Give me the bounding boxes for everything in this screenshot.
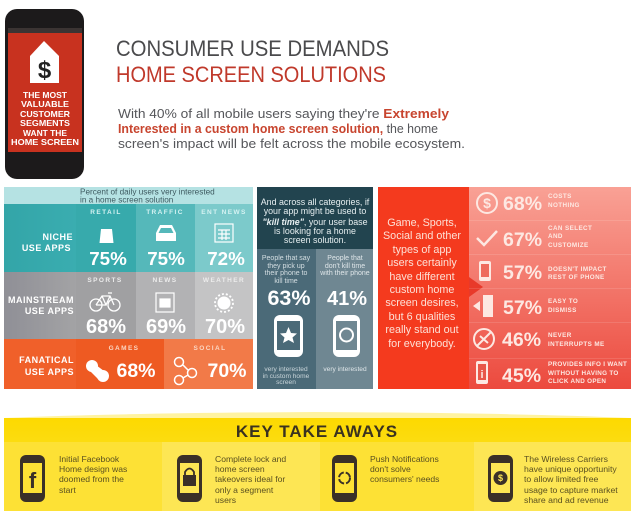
icon: car [156, 225, 176, 241]
column: 63%: screen [276, 379, 296, 386]
column: 41% [316, 249, 373, 389]
quality: costs nothing: COSTS [548, 193, 572, 200]
takeaway: wireless carriers: share and ad revenue [524, 495, 609, 505]
title [116, 36, 389, 87]
icon: bicycle [90, 293, 120, 311]
row: fanatical use apps [4, 339, 253, 389]
quality: easy to dismiss: DISMISS [548, 307, 577, 314]
takeaway: facebook [20, 454, 127, 502]
takeaway: facebook: f [29, 468, 37, 493]
column: 41%: don't kill time [325, 263, 365, 270]
column: 63%: kill time [274, 278, 298, 285]
phone caption: THE MOST [23, 91, 67, 100]
kill time heading [257, 187, 373, 249]
takeaway: lock: takeovers ideal for [215, 474, 285, 484]
column: 41%: 41% [327, 288, 367, 310]
takeaway: facebook: doomed from the [59, 474, 124, 484]
takeaway: push notifications: don't solve [370, 464, 411, 474]
takeaway: wireless carriers: have unique opportunity [524, 464, 617, 474]
quality: costs nothing: NOTHING [548, 202, 580, 209]
quality: provides info: i [480, 369, 484, 381]
icon: price tag [30, 41, 59, 84]
column: 63%: they pick up [267, 263, 305, 270]
intro text: With 40% of all mobile users saying they're Extremely [118, 107, 449, 121]
icon: newspaper [215, 224, 233, 242]
title: HOME SCREEN SOLUTIONS [116, 62, 386, 87]
row: niche use apps: ENT NEWS [201, 209, 247, 216]
kill time heading: "kill time", your user base [262, 217, 368, 227]
row: mainstream use apps: NEWS [152, 277, 178, 284]
quality: easy to dismiss: 57% [503, 297, 542, 319]
row: fanatical use apps: USE APPS [25, 367, 74, 377]
quality: never interrupts me: INTERRUPTS ME [548, 341, 605, 348]
row: niche use apps: 75% [147, 248, 185, 269]
row: niche use apps: NICHE [42, 232, 73, 242]
row: mainstream use apps: MAINSTREAM [8, 295, 74, 305]
column: 63%: in custom home [263, 373, 310, 380]
icon: shopping bag [100, 229, 114, 243]
quality: costs nothing [477, 193, 580, 215]
row: mainstream use apps: SPORTS [87, 277, 123, 284]
takeaway: wireless carriers: usage to capture market [524, 485, 618, 495]
row: niche use apps: 72% [207, 248, 245, 269]
takeaway: lock [177, 454, 286, 505]
panel: app categories [4, 187, 253, 389]
panel: red callout [378, 187, 483, 389]
row: mainstream use apps [4, 272, 253, 339]
quality: costs nothing: $ [483, 195, 491, 211]
kill time heading: your app might be used to [264, 206, 366, 216]
phone caption: WANT THE [23, 129, 68, 138]
takeaway: wireless carriers: to allow limited free [524, 474, 599, 484]
quality: provides info: WITHOUT HAVING TO [548, 370, 619, 377]
panel: key take aways [4, 412, 631, 511]
column: 63% [257, 249, 316, 389]
phone caption: HOME SCREEN [11, 138, 79, 147]
kill time heading: is looking for a home [274, 226, 356, 236]
row: mainstream use apps: 70% [205, 316, 245, 338]
takeaway: wireless carriers: $ [498, 473, 503, 483]
row: fanatical use apps: 68% [116, 360, 156, 382]
column: 63%: People that say [262, 255, 311, 262]
row: mainstream use apps: WEATHER [203, 277, 245, 284]
intro text [118, 107, 465, 151]
takeaway: wireless carriers: The Wireless Carriers [524, 454, 609, 464]
icon: social network [174, 358, 196, 384]
quality: never interrupts me [474, 329, 605, 351]
takeaway: facebook: Home design was [59, 464, 127, 474]
icon: phone with face [333, 315, 360, 357]
column: 63%: very interested [264, 366, 308, 373]
phone caption: SEGMENTS [20, 119, 71, 128]
takeaway: push notifications [332, 454, 439, 502]
panel: red callout: for everybody. [388, 338, 456, 350]
takeaway: wireless carriers [488, 454, 618, 505]
takeaway: lock: home screen [215, 464, 265, 474]
takeaway: lock: only a segment [215, 485, 274, 495]
row: niche use apps: TRAFFIC [146, 209, 184, 216]
panel: red callout: screen desires, [385, 297, 459, 309]
icon: price tag: $ [38, 57, 52, 84]
panel: red callout: Social and other [383, 230, 461, 242]
chart subtitle: Percent of daily users very interested [80, 188, 215, 196]
row: niche use apps [4, 204, 253, 272]
row: fanatical use apps: 70% [207, 360, 247, 382]
quality: never interrupts me: NEVER [548, 332, 572, 339]
panel: red callout: have different [389, 271, 455, 283]
row: mainstream use apps: 69% [146, 316, 186, 338]
quality: can select and customize: AND [548, 233, 563, 240]
chart subtitle: in a home screen solution [80, 196, 174, 204]
quality: easy to dismiss: EASY TO [548, 298, 578, 305]
quality: doesn't impact rest of phone: DOESN'T IMPACT [548, 266, 607, 273]
row: fanatical use apps: SOCIAL [194, 345, 226, 352]
kill time heading: screen solution. [284, 235, 346, 245]
row: fanatical use apps: FANATICAL [19, 355, 74, 365]
row: niche use apps: 75% [89, 248, 127, 269]
heading: KEY TAKE AWAYS [236, 422, 398, 441]
panel: red callout: but 6 qualities [389, 311, 456, 323]
phone caption: VALUABLE [21, 100, 70, 109]
panel: six qualities [469, 187, 631, 389]
quality: provides info: PROVIDES INFO I WANT [548, 361, 627, 368]
kill time heading: And across all categories, if [261, 197, 370, 207]
row: mainstream use apps: 68% [86, 316, 126, 338]
takeaway: push notifications: consumers' needs [370, 474, 439, 484]
quality: costs nothing: 68% [503, 193, 542, 215]
panel: red callout: Game, Sports, [387, 217, 457, 229]
quality: provides info [476, 361, 627, 387]
quality: never interrupts me: 46% [502, 329, 541, 351]
panel: red callout: types of app [393, 244, 451, 256]
column: 63%: 63% [267, 286, 311, 310]
quality: doesn't impact rest of phone: REST OF PHONE [548, 274, 605, 281]
icon: game controller [86, 360, 109, 382]
phone caption [11, 91, 79, 147]
quality: doesn't impact rest of phone [479, 261, 607, 284]
intro text: Interested in a custom home screen solution, the home [118, 122, 438, 136]
quality: can select and customize: 67% [503, 229, 542, 251]
takeaway: lock: users [215, 495, 236, 505]
column: 41%: People that [327, 255, 363, 262]
icon: phone with star [274, 315, 303, 357]
title: CONSUMER USE DEMANDS [116, 36, 389, 61]
takeaway: facebook: Initial Facebook [59, 454, 120, 464]
column: 63%: their phone to [265, 270, 308, 277]
column: 41%: with their phone [319, 270, 370, 277]
quality: provides info: 45% [502, 365, 541, 387]
quality: can select and customize: CUSTOMIZE [548, 242, 589, 249]
row: niche use apps: RETAIL [90, 209, 122, 216]
panel: red callout: really stand out [385, 324, 459, 336]
column: 41%: very interested [323, 366, 367, 373]
takeaway: lock: Complete lock and [215, 454, 286, 464]
quality: can select and customize [477, 225, 592, 251]
quality: can select and customize: CAN SELECT [548, 225, 592, 232]
quality: easy to dismiss [473, 295, 578, 319]
icon: sun [215, 294, 233, 312]
intro text: screen's impact will be felt across the mobile ecosystem. [118, 137, 465, 151]
chart subtitle [4, 187, 253, 204]
panel: red callout: custom home [390, 284, 454, 296]
panel: red callout: users certainly [387, 257, 457, 269]
panel: kill time [257, 187, 373, 389]
quality: doesn't impact rest of phone: 57% [503, 262, 542, 284]
row: mainstream use apps: USE APPS [25, 306, 74, 316]
quality: provides info: CLICK AND OPEN [548, 378, 606, 385]
phone caption: CUSTOMER [20, 110, 70, 119]
phone illustration [5, 9, 84, 179]
takeaway: push notifications: Push Notifications [370, 454, 439, 464]
icon: newspaper [156, 293, 174, 312]
takeaway: facebook: start [59, 485, 76, 495]
row: niche use apps: USE APPS [22, 243, 71, 253]
row: fanatical use apps: GAMES [109, 345, 139, 352]
